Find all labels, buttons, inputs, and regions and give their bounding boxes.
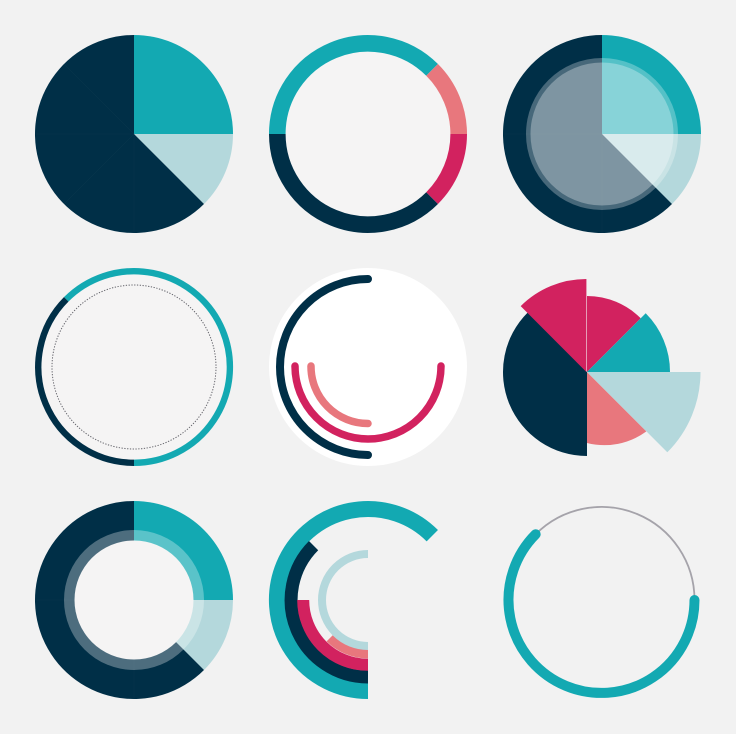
ring with dotted inner circle [38,271,230,463]
exploded rose pie chart [503,279,701,456]
donut chart: four colour segments [277,43,459,225]
concentric rounded arcs on white disc [269,268,467,466]
progress ring with thin grey track [509,507,695,693]
nested half-open arcs [277,509,432,691]
pie chart with translucent circle overlay [503,35,701,233]
donut chart with translucent inner ring [35,501,233,699]
pie chart: teal, light blue and navy sectors [35,35,233,233]
